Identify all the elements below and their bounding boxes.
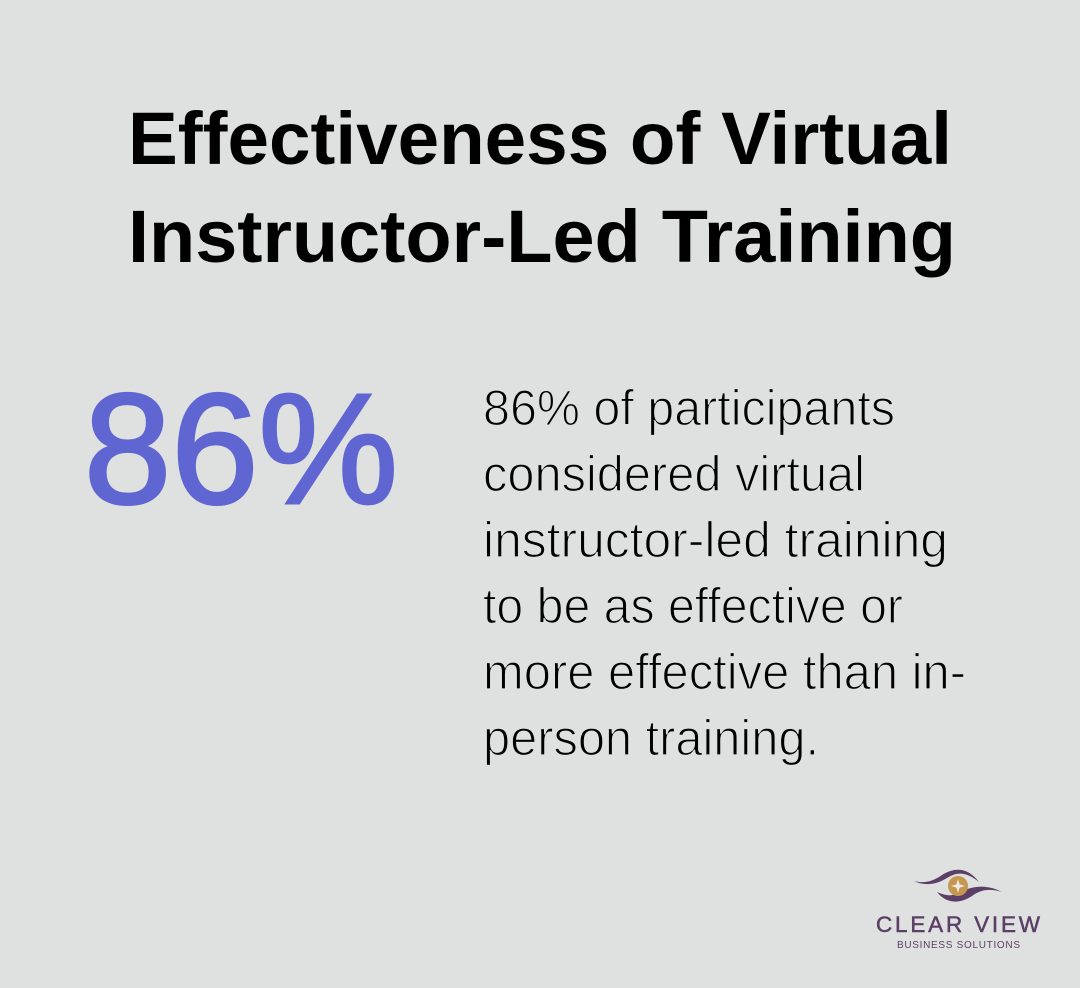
- title: Instructor-Led Training: [128, 195, 956, 278]
- big statistic: 86%: 86%: [84, 362, 398, 537]
- description text: person training.: [483, 710, 819, 766]
- description text: [483, 380, 966, 766]
- title: [128, 97, 956, 278]
- description text: 86% of participants: [483, 380, 895, 436]
- logo wordmark: CLEAR VIEW: [876, 912, 1041, 937]
- logo tagline: BUSINESS SOLUTIONS: [897, 940, 1020, 951]
- description text: more effective than in-: [483, 644, 966, 700]
- logo: Clear View Business Solutions: [876, 870, 1041, 951]
- title: Effectiveness of Virtual: [128, 97, 952, 180]
- description text: considered virtual: [483, 446, 865, 502]
- icon: eye: [914, 870, 1002, 902]
- description text: instructor-led training: [483, 512, 948, 568]
- description text: to be as effective or: [483, 578, 903, 634]
